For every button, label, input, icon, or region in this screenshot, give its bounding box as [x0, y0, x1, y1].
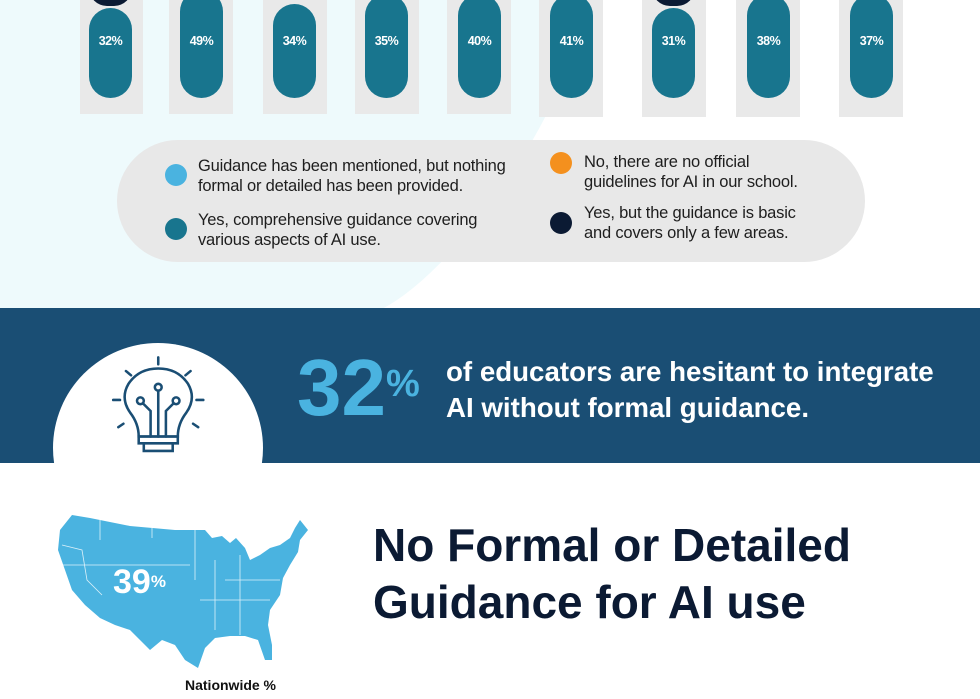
map of US — [58, 515, 308, 668]
legend: formal or detailed has been provided. — [198, 177, 463, 195]
heading: No Formal or Detailed — [373, 519, 851, 571]
map value: 39% — [113, 563, 166, 601]
bar chart: 37% — [860, 34, 883, 48]
bar chart: 41% — [560, 34, 583, 48]
legend — [117, 140, 865, 262]
bar chart: 31% — [662, 34, 685, 48]
icon: lightbulb in circle — [53, 343, 263, 463]
stat text — [446, 356, 934, 423]
heading: Guidance for AI use — [373, 576, 806, 628]
stat text: AI without formal guidance. — [446, 392, 809, 423]
legend: various aspects of AI use. — [198, 231, 381, 249]
legend: guidelines for AI in our school. — [584, 173, 798, 191]
legend: No, there are no official — [584, 153, 749, 171]
stat text: of educators are hesitant to integrate — [446, 356, 934, 387]
bar chart: 38% — [757, 34, 780, 48]
legend: Yes, comprehensive guidance covering — [198, 211, 477, 229]
heading — [373, 519, 851, 628]
legend: Guidance has been mentioned, but nothing — [198, 157, 506, 175]
bar chart: 40% — [468, 34, 491, 48]
background curved light region — [0, 0, 545, 308]
bar chart: 35% — [375, 34, 398, 48]
stat number: 32% — [297, 343, 420, 432]
bar chart — [80, 0, 903, 117]
map caption: Nationwide % — [185, 677, 276, 693]
bar chart: 49% — [190, 34, 213, 48]
legend: and covers only a few areas. — [584, 224, 788, 242]
bar chart: 32% — [99, 34, 122, 48]
legend: Yes, but the guidance is basic — [584, 204, 796, 222]
banner — [0, 308, 980, 463]
bar chart: 34% — [283, 34, 306, 48]
